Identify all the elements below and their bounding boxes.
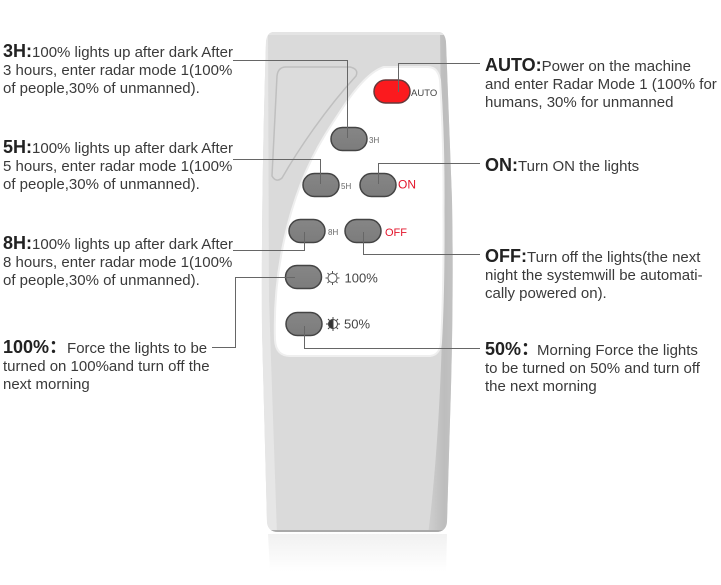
text: 8H: 8 hours, enter radar mode 1(100% bbox=[3, 254, 232, 271]
text: 8H: 8H:100% lights up after dark After bbox=[3, 233, 233, 253]
remote control bbox=[262, 32, 453, 550]
button: 3H: 3H bbox=[369, 136, 379, 145]
icon: sun outline bbox=[326, 271, 340, 285]
button: 50%: 50% bbox=[344, 316, 370, 332]
leader lines bbox=[212, 60, 480, 348]
text: 3H: 3H:100% lights up after dark After bbox=[3, 41, 233, 61]
text: 100% bbox=[3, 337, 210, 393]
button: 100% bbox=[286, 266, 378, 288]
text: AUTO: humans, 30% for unmanned bbox=[485, 94, 673, 111]
text: 100%: turned on 100%and turn off the bbox=[3, 358, 210, 375]
text: 50%: the next morning bbox=[485, 378, 597, 395]
button: 50% bbox=[286, 312, 370, 336]
button: ON: ON bbox=[398, 178, 416, 192]
text: 50%: 50%：Morning Force the lights bbox=[485, 339, 698, 359]
text: 3H: of people,30% of unmanned). bbox=[3, 80, 200, 97]
text: 5H: 5 hours, enter radar mode 1(100% bbox=[3, 158, 232, 175]
button: ON bbox=[360, 174, 416, 196]
text: OFF: night the systemwill be automati- bbox=[485, 267, 703, 284]
text: 100%: next morning bbox=[3, 376, 90, 393]
button: 5H bbox=[303, 174, 351, 196]
text: 5H: of people,30% of unmanned). bbox=[3, 176, 200, 193]
button: 3H bbox=[331, 128, 379, 150]
button: 100%: 100% bbox=[344, 270, 378, 286]
text: OFF bbox=[485, 246, 703, 302]
text: AUTO: AUTO:Power on the machine bbox=[485, 55, 691, 75]
button: 8H: 8H bbox=[328, 228, 338, 237]
text: 3H: 3 hours, enter radar mode 1(100% bbox=[3, 62, 232, 79]
button: OFF bbox=[345, 220, 407, 242]
text: 100%: 100%：Force the lights to be bbox=[3, 337, 207, 357]
button: AUTO bbox=[374, 80, 437, 103]
text: OFF: OFF:Turn off the lights(the next bbox=[485, 246, 701, 266]
text: 50% bbox=[485, 339, 701, 395]
text: 5H: 5H:100% lights up after dark After bbox=[3, 137, 233, 157]
button: AUTO: AUTO bbox=[411, 88, 437, 99]
text: 5H bbox=[3, 137, 233, 193]
icon: half sun bbox=[326, 317, 340, 331]
text: AUTO bbox=[485, 55, 717, 111]
remote body bbox=[255, 30, 460, 535]
recessed grip panel bbox=[272, 67, 357, 180]
button: 8H bbox=[289, 220, 338, 242]
text: 50%: to be turned on 50% and turn off bbox=[485, 360, 701, 377]
text: 3H bbox=[3, 41, 233, 97]
text: OFF: cally powered on). bbox=[485, 285, 607, 302]
text: AUTO: and enter Radar Mode 1 (100% for bbox=[485, 76, 717, 93]
text: 8H: of people,30% of unmanned). bbox=[3, 272, 200, 289]
text: ON: ON:Turn ON the lights bbox=[485, 155, 639, 175]
text: 8H bbox=[3, 233, 233, 289]
remote reflection bbox=[268, 534, 447, 572]
button: 5H: 5H bbox=[341, 182, 351, 191]
button: OFF: OFF bbox=[385, 227, 407, 239]
white key panel bbox=[275, 67, 444, 356]
